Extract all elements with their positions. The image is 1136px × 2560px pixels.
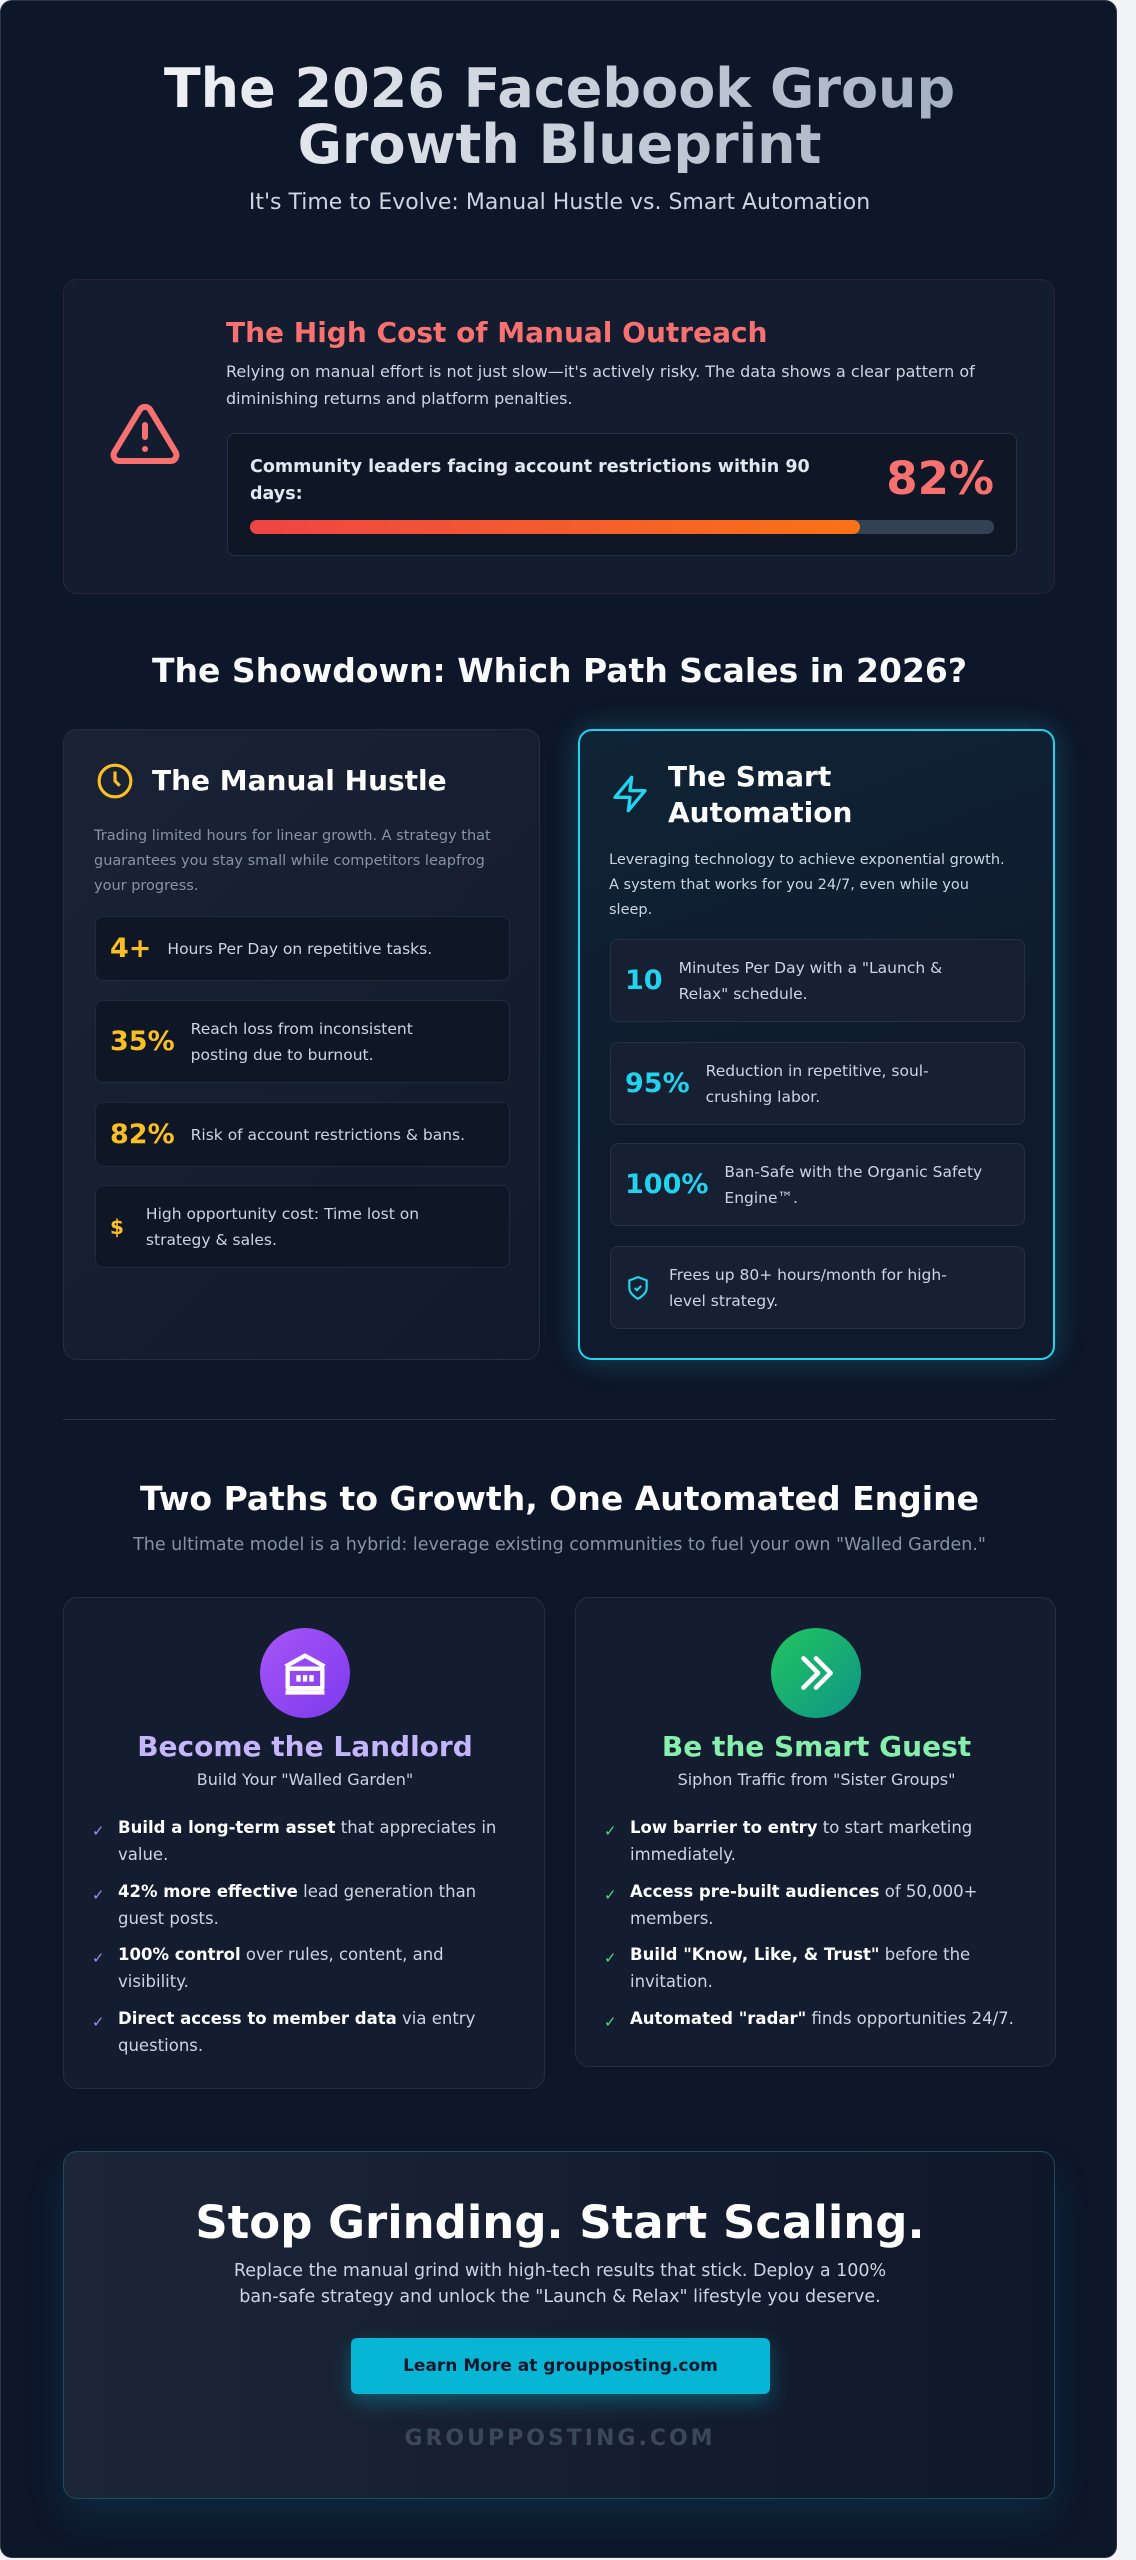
- description: Relying on manual effort is not just slow—it's actively risky. The data shows a clear pattern of diminishing returns and platform penalties.: [226, 362, 975, 408]
- stat: 4+: 4+: [110, 932, 151, 964]
- panel: landlord: Direct access to member data via entry questions.: [118, 2009, 475, 2055]
- panel: smart guest: ✓: [604, 1949, 617, 1967]
- stat: 4+: Hours Per Day on repetitive tasks.: [167, 940, 432, 958]
- stat: 100%: [610, 1143, 1025, 1226]
- footer brand: GROUPPOSTING.COM: [404, 2426, 716, 2451]
- stat box with bar: 82%: [886, 452, 994, 505]
- heading: showdown: The Showdown: Which Path Scales in 2026?: [152, 651, 967, 690]
- stat: 10: 10: [625, 964, 663, 996]
- stat: 95%: Reduction in repetitive, soul-crushing labor.: [706, 1062, 929, 1106]
- stat: shield: [610, 1246, 1025, 1329]
- stat box with bar: Community leaders facing account restrictions within 90 days:: [250, 457, 810, 504]
- icon: lightning: [613, 776, 647, 812]
- heading: The High Cost of Manual Outreach: [226, 316, 768, 349]
- stat: 95%: [610, 1042, 1025, 1125]
- panel: smart guest: Low barrier to entry to start marketing immediately.: [630, 1818, 972, 1864]
- heading: Automation: [668, 796, 852, 829]
- bullets: [604, 1818, 1014, 2031]
- panel: smart guest: Automated "radar" finds opportunities 24/7.: [630, 2009, 1014, 2028]
- title: Growth Blueprint: [298, 113, 821, 176]
- heading: [668, 760, 852, 829]
- stat: 4+: [95, 916, 510, 981]
- panel: smart guest: ✓: [604, 1886, 617, 1904]
- panel: landlord: ✓: [92, 2013, 105, 2031]
- stat: 10: [610, 939, 1025, 1022]
- panel: smart guest: Access pre-built audiences of 50,000+ members.: [630, 1882, 977, 1928]
- stat: opportunity cost: [95, 1185, 510, 1268]
- subtitle: Build Your "Walled Garden": [197, 1770, 413, 1789]
- panel: high cost: [63, 279, 1055, 594]
- panel: smart guest: ✓: [604, 1822, 617, 1840]
- title: Become the Landlord: [137, 1730, 473, 1763]
- panel: landlord: 42% more effective lead generation than guest posts.: [118, 1882, 476, 1928]
- panel: manual hustle: [63, 729, 540, 1360]
- title: The 2026 Facebook Group: [164, 57, 955, 120]
- icon: clock: [98, 764, 132, 798]
- stat: 82%: Risk of account restrictions & bans.: [191, 1126, 465, 1144]
- stat: 10: Minutes Per Day with a "Launch & Relax" schedule.: [679, 958, 942, 1002]
- subtitle: It's Time to Evolve: Manual Hustle vs. Smart Automation: [249, 190, 870, 215]
- stat: 100%: 100%: [625, 1168, 708, 1200]
- description: Leveraging technology to achieve exponential growth. A system that works for you 24/7, even while you sleep.: [609, 852, 1005, 918]
- stat: 35%: [95, 1000, 510, 1083]
- subtitle: Siphon Traffic from "Sister Groups": [678, 1770, 955, 1789]
- stat box with bar: [227, 433, 1017, 556]
- CTA heading: Stop Grinding. Start Scaling.: [195, 2196, 925, 2249]
- panel: smart guest: ✓: [604, 2013, 617, 2031]
- button: [351, 2338, 770, 2394]
- panel: landlord: ✓: [92, 1949, 105, 1967]
- heading: The Manual Hustle: [152, 764, 447, 797]
- icon: bank: [260, 1628, 350, 1718]
- panel: smart guest: Build "Know, Like, & Trust" before the invitation.: [630, 1945, 970, 1991]
- button: Learn More at groupposting.com: [403, 2356, 718, 2376]
- icon: chevrons: [771, 1628, 861, 1718]
- panel: smart automation: [578, 729, 1055, 1360]
- stat: 35%: Reach loss from inconsistent posting due to burnout.: [191, 1020, 413, 1064]
- description: Trading limited hours for linear growth. A strategy that guarantees you stay small while competitors leapfrog your progress.: [94, 828, 491, 894]
- stat: 95%: 95%: [625, 1068, 690, 1098]
- panel: call to action: [63, 2151, 1055, 2499]
- panel: landlord: 100% control over rules, content, and visibility.: [118, 1945, 444, 1991]
- panel: landlord: Build a long-term asset that appreciates in value.: [118, 1818, 496, 1864]
- title: [1, 61, 1118, 173]
- title: Be the Smart Guest: [662, 1730, 971, 1763]
- stat: shield: Frees up 80+ hours/month for high-level strategy.: [669, 1266, 947, 1310]
- stat: 100%: Ban-Safe with the Organic Safety Engine™.: [724, 1162, 982, 1206]
- stat: 82%: [95, 1102, 510, 1167]
- stat: opportunity cost: High opportunity cost: Time lost on strategy & sales.: [146, 1204, 419, 1248]
- subheading: The ultimate model is a hybrid: leverage existing communities to fuel your own "Walled Garden.": [133, 1535, 986, 1555]
- stat: 82%: 82%: [110, 1118, 175, 1150]
- panel: landlord: ✓: [92, 1886, 105, 1904]
- bullets: [92, 1818, 496, 2055]
- panel: landlord: ✓: [92, 1822, 105, 1840]
- CTA text: Replace the manual grind with high-tech results that stick. Deploy a 100% ban-safe strategy and unlock the "Launch & Relax" lifestyle you deserve.: [234, 2261, 886, 2307]
- panel: landlord: [63, 1597, 545, 2089]
- heading: two paths: Two Paths to Growth, One Automated Engine: [140, 1479, 979, 1518]
- stat: 35%: 35%: [110, 1026, 175, 1056]
- panel: smart guest: [575, 1597, 1056, 2067]
- progress bar: [250, 520, 994, 534]
- stat: opportunity cost: $: [110, 1214, 124, 1238]
- icon: warning: [110, 404, 180, 464]
- heading: The Smart: [668, 760, 831, 793]
